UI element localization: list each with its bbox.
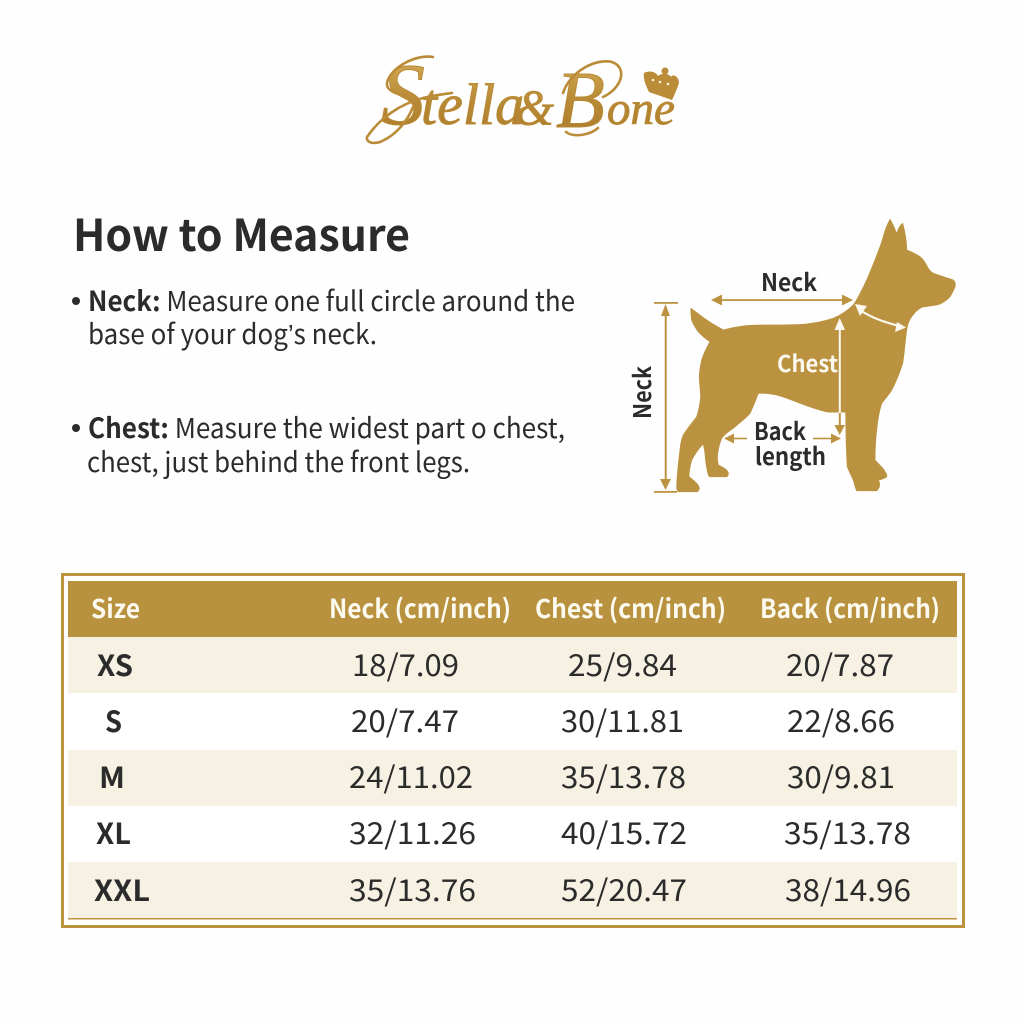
text block: neck instruction: Neck: Measure one full circle around the xyxy=(88,279,575,319)
icon: crown xyxy=(644,68,679,100)
row: XXL: 35/13.76 xyxy=(349,866,476,910)
heading: How to Measure: How to Measure xyxy=(73,200,410,264)
arrow: top neck xyxy=(711,294,853,306)
table border xyxy=(62,574,964,926)
row: XS: 25/9.84 xyxy=(568,641,677,685)
row: XXL: 52/20.47 xyxy=(561,866,687,910)
arrow: chest vertical xyxy=(834,318,845,435)
table header xyxy=(68,581,957,637)
row: S: 20/7.47 xyxy=(351,697,459,741)
row: M: 30/9.81 xyxy=(787,753,895,797)
table header: Neck (cm/inch) xyxy=(329,589,511,626)
table header: Back (cm/inch) xyxy=(760,589,940,626)
row: XL: 35/13.78 xyxy=(784,809,911,853)
dog measurement diagram xyxy=(623,219,955,493)
icon: dog silhouette xyxy=(677,219,955,492)
text block: neck instruction xyxy=(72,279,575,352)
row: XL xyxy=(68,806,957,862)
label: Back length: Back xyxy=(754,412,806,447)
text block: chest instruction xyxy=(72,406,565,480)
table header: Size xyxy=(91,589,140,626)
label: top Neck: Neck xyxy=(761,263,817,298)
row: XS xyxy=(68,637,957,693)
text block: chest instruction: Chest: Measure the widest part o chest, xyxy=(88,406,565,446)
row: XXL xyxy=(68,862,957,920)
label: Back length: length xyxy=(755,437,826,472)
arrow: neck curve xyxy=(855,304,906,332)
row: M: 24/11.02 xyxy=(349,753,473,797)
table header: Chest (cm/inch) xyxy=(535,589,726,626)
arrow: left height xyxy=(654,302,678,493)
row: M: 35/13.78 xyxy=(561,753,686,797)
row: XXL: XXL xyxy=(94,868,150,910)
logo: Stella & Bone: tella xyxy=(421,72,524,137)
logo: Stella & Bone: & xyxy=(515,79,554,135)
row: M: M xyxy=(99,755,125,797)
logo: Stella & Bone: one xyxy=(607,83,675,135)
row: XS: XS xyxy=(97,643,133,685)
row: XL: XL xyxy=(96,811,131,853)
row: XL: 32/11.26 xyxy=(349,809,476,853)
row: XL: 40/15.72 xyxy=(561,809,687,853)
row: S: S xyxy=(105,699,122,741)
row: XXL: 38/14.96 xyxy=(785,866,911,910)
logo: Stella & Bone: B xyxy=(556,57,605,145)
label: vertical Neck: Neck xyxy=(623,366,658,419)
text block: neck instruction: base of your dog’s neck. xyxy=(88,312,377,352)
row: S: 22/8.66 xyxy=(787,697,895,741)
size table xyxy=(62,574,964,926)
row: S xyxy=(68,693,957,750)
label: Chest: Chest xyxy=(777,345,838,379)
row: XS: 20/7.87 xyxy=(786,641,894,685)
row: M xyxy=(68,750,957,806)
text block: chest instruction: chest, just behind the front legs. xyxy=(87,440,470,480)
row: XS: 18/7.09 xyxy=(352,641,459,685)
arrow: back length xyxy=(724,434,841,444)
logo: Stella & Bone: S xyxy=(381,47,425,144)
label: Back length xyxy=(754,412,826,472)
row: S: 30/11.81 xyxy=(561,697,684,741)
logo: Stella & Bone xyxy=(367,47,679,145)
